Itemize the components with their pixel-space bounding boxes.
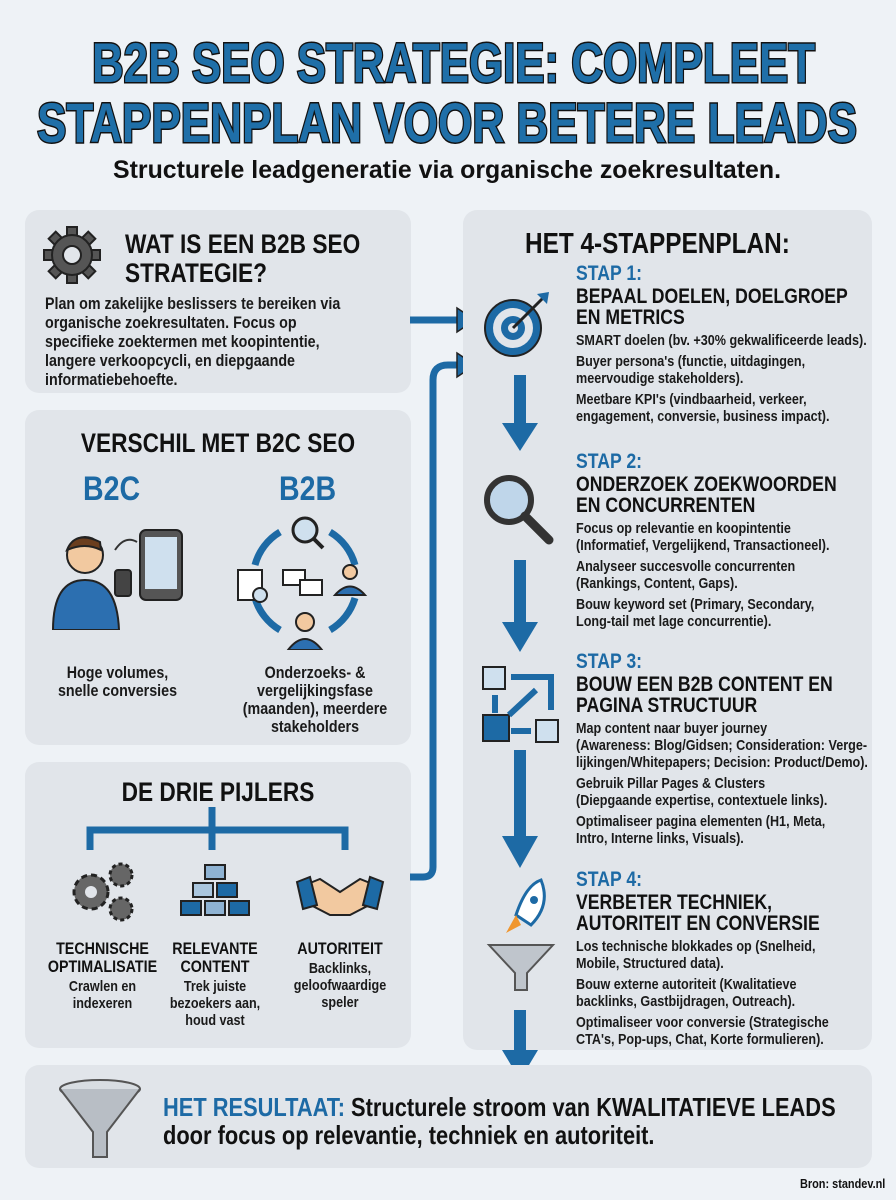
tree connector [86, 807, 348, 850]
step 4: Optimaliseer voor conversie (Strategische [576, 1014, 829, 1031]
step 3: STAP 3: [576, 650, 642, 673]
step 3: (Diepgaande expertise, contextuele links). [576, 792, 827, 809]
step 3: PAGINA STRUCTUUR [576, 694, 757, 717]
pillar: technische: indexeren [73, 995, 132, 1012]
text [163, 1092, 836, 1150]
pillar: autoriteit: speler [321, 994, 359, 1011]
step 1: Buyer persona's (functie, uitdagingen, [576, 353, 805, 370]
step 1: BEPAAL DOELEN, DOELGROEP [576, 285, 848, 308]
arrow: connectors to stappenplan [410, 306, 463, 880]
step 1: STAP 1: [576, 262, 642, 285]
step 2: Analyseer succesvolle concurrenten [576, 558, 795, 575]
heading: WAT IS EEN B2B SEO [125, 229, 360, 259]
step 4: CTA's, Pop-ups, Chat, Korte formulieren). [576, 1031, 824, 1048]
icon: rocket funnel [486, 878, 556, 991]
text b2c: Hoge volumes, [67, 663, 168, 682]
step 1: Meetbare KPI's (vindbaarheid, verkeer, [576, 391, 807, 408]
step 4: VERBETER TECHNIEK, [576, 891, 772, 914]
arrow 4 [502, 1010, 538, 1065]
text b2c: snelle conversies [58, 681, 177, 700]
panel: drie pijlers [25, 762, 411, 1048]
step 2: (Rankings, Content, Gaps). [576, 575, 738, 592]
label b2c: B2C [83, 470, 140, 508]
icon: structure [482, 666, 559, 743]
step 3: BOUW EEN B2B CONTENT EN [576, 673, 833, 696]
icon: funnel [59, 1079, 141, 1158]
pillar: autoriteit [294, 876, 386, 1011]
step 3: lijkingen/Whitepapers; Decision: Product/Demo). [576, 754, 868, 771]
text: specifieke zoektermen met koopintentie, [45, 332, 320, 351]
step 4: AUTORITEIT EN CONVERSIE [576, 912, 820, 935]
text b2b: stakeholders [271, 717, 359, 736]
pillar: content: houd vast [185, 1012, 245, 1029]
pillar: technische [48, 862, 157, 1012]
step 2: Focus op relevantie en koopintentie [576, 520, 791, 537]
text b2b: Onderzoeks- & [265, 663, 365, 682]
step 4: Bouw externe autoriteit (Kwalitatieve [576, 976, 797, 993]
text b2b: vergelijkingsfase [257, 681, 373, 700]
pillar: technische: Crawlen en [69, 978, 136, 995]
step 4: Mobile, Structured data). [576, 955, 724, 972]
step 2: STAP 2: [576, 450, 642, 473]
title [36, 31, 857, 154]
pillar: autoriteit: geloofwaardige [294, 977, 386, 994]
heading: DE DRIE PIJLERS [122, 777, 314, 807]
pillar: content: CONTENT [180, 957, 250, 976]
step 2: Bouw keyword set (Primary, Secondary, [576, 596, 814, 613]
step 2: (Informatief, Vergelijkend, Transactioneel). [576, 537, 829, 554]
icon: handshake [296, 876, 384, 916]
step 2: ONDERZOEK ZOEKWOORDEN [576, 473, 837, 496]
icon: person with phone [52, 529, 183, 630]
subtitle: Structurele leadgeneratie via organische zoekresultaten. [113, 156, 781, 184]
icon: target [484, 292, 549, 357]
step 4: backlinks, Gastbijdragen, Outreach). [576, 993, 795, 1010]
heading [125, 229, 360, 288]
step 3: Intro, Interne links, Visuals). [576, 830, 744, 847]
text: langere verkoopcycli, en diepgaande [45, 351, 295, 370]
text: Plan om zakelijke beslissers te bereiken via [45, 294, 340, 313]
heading: HET 4-STAPPENPLAN: [525, 228, 790, 260]
icon: b2b cycle [237, 516, 368, 650]
step 4 [576, 868, 829, 1048]
pillar: autoriteit: Backlinks, [309, 960, 371, 977]
pillar: content: RELEVANTE [172, 939, 258, 958]
panel: stappenplan [463, 210, 872, 1050]
arrow 1 [502, 375, 538, 451]
text [45, 294, 340, 389]
pillar: content [170, 864, 260, 1029]
pillar: content: Trek juiste [184, 978, 246, 995]
panel: resultaat [25, 1065, 872, 1168]
icon: blocks [180, 864, 250, 916]
icon: gear [43, 226, 101, 284]
step 4: STAP 4: [576, 868, 642, 891]
step 1 [576, 262, 867, 425]
step 3: Optimaliseer pagina elementen (H1, Meta, [576, 813, 825, 830]
step 1: meervoudige stakeholders). [576, 370, 743, 387]
icon: magnifier [484, 475, 554, 544]
source: Bron: standev.nl [800, 1176, 885, 1191]
text: door focus op relevantie, techniek en autoriteit. [163, 1120, 655, 1150]
label b2b: B2B [279, 470, 336, 508]
step 3: Gebruik Pillar Pages & Clusters [576, 775, 765, 792]
heading: STRATEGIE? [125, 258, 267, 288]
text b2c [58, 663, 177, 700]
panel: wat is [25, 210, 411, 393]
step 3: Map content naar buyer journey [576, 720, 767, 737]
step 2: EN CONCURRENTEN [576, 494, 755, 517]
pillar: autoriteit: AUTORITEIT [297, 939, 383, 958]
step 4: Los technische blokkades op (Snelheid, [576, 938, 815, 955]
step 1: EN METRICS [576, 306, 685, 329]
step 2: Long-tail met lage concurrentie). [576, 613, 771, 630]
text b2b: (maanden), meerdere [243, 699, 387, 718]
heading: VERSCHIL MET B2C SEO [81, 428, 355, 458]
panel: verschil [25, 410, 411, 745]
step 3: (Awareness: Blog/Gidsen; Consideration: Verge- [576, 737, 867, 754]
text: organische zoekresultaten. Focus op [45, 313, 297, 332]
pillar: technische: TECHNISCHE [56, 939, 149, 958]
pillar: content: bezoekers aan, [170, 995, 260, 1012]
arrow 3 [502, 750, 538, 868]
arrow 2 [502, 560, 538, 652]
step 1: SMART doelen (bv. +30% gekwalificeerde leads). [576, 332, 867, 349]
text: informatiebehoefte. [45, 370, 178, 389]
text b2b [243, 663, 387, 736]
text: HET RESULTAAT: Structurele stroom van KWALITATIEVE LEADS [163, 1092, 836, 1122]
step 3 [576, 650, 868, 847]
icon: gears [72, 862, 134, 922]
step 2 [576, 450, 837, 630]
pillar: technische: OPTIMALISATIE [48, 957, 157, 976]
step 1: engagement, conversie, business impact). [576, 408, 829, 425]
